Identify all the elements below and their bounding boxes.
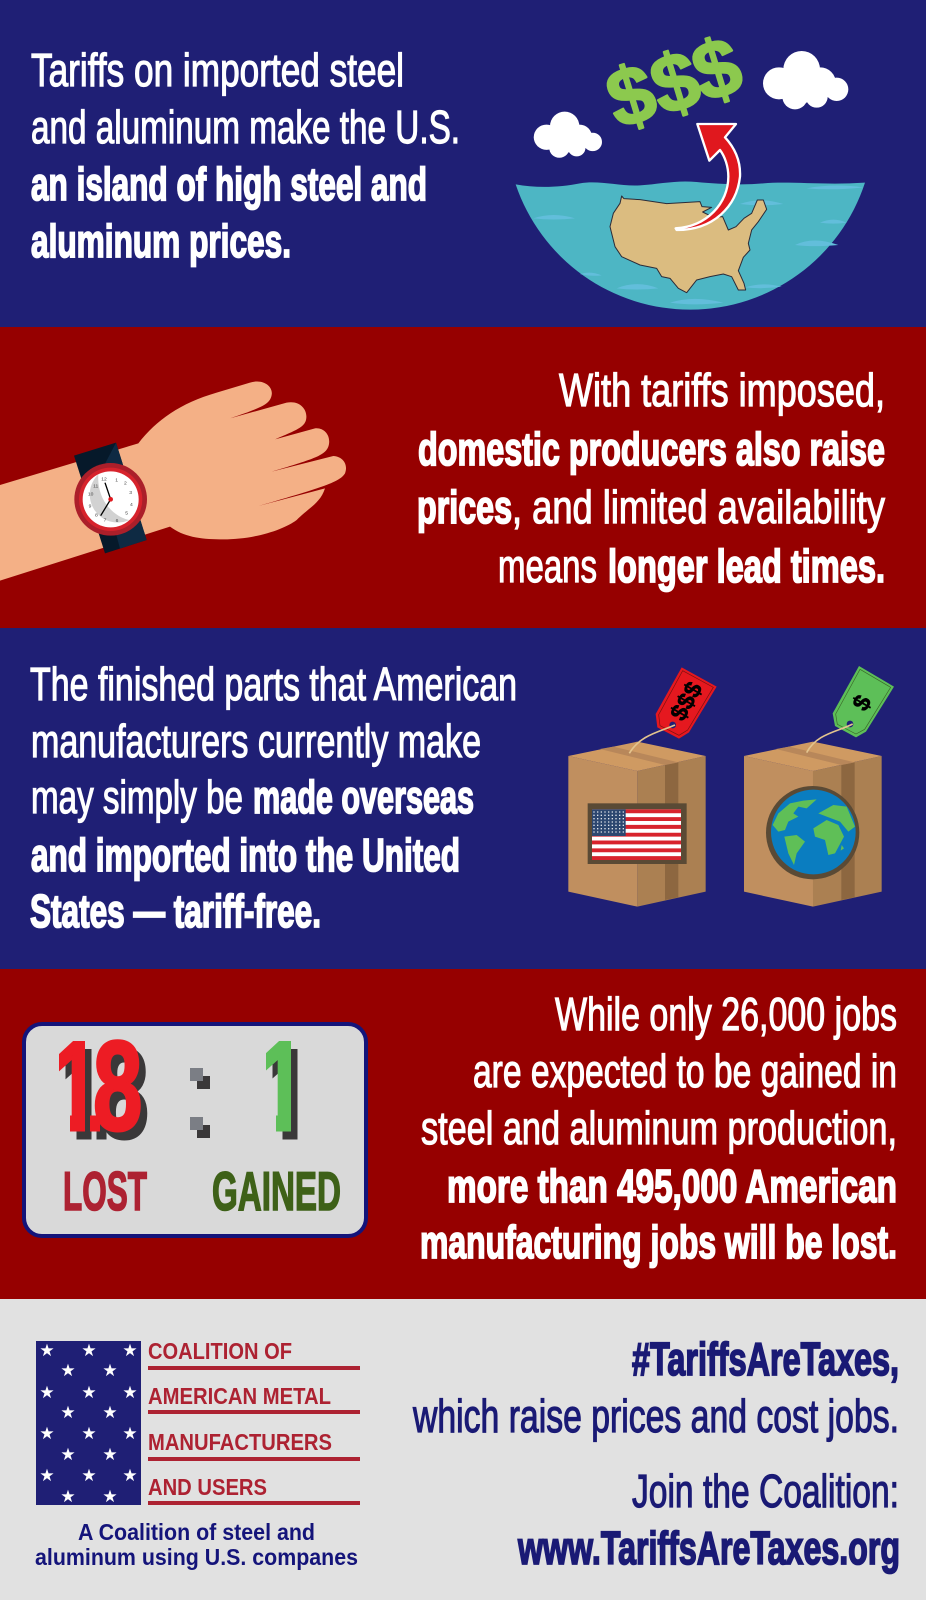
icon: map of the United States [610,196,767,293]
logo: star field [36,1341,141,1506]
logo: star field: ★ [81,1341,97,1360]
logo: star field: ★ [81,1383,97,1402]
logo: star field: ★ [39,1424,55,1443]
icon: red rising arrow [676,124,740,230]
text: overseas statement: The finished parts that American [30,658,517,710]
text: lead times statement [417,364,885,592]
logo: wordmark: AMERICAN METAL [148,1383,331,1409]
icon: watch face: 9 [89,503,92,509]
logo: star field: ★ [122,1466,138,1485]
text: overseas statement: manufacturers currently make [31,715,481,767]
logo: wordmark: COALITION OF [148,1338,292,1364]
logo: star field: ★ [81,1424,97,1443]
icon: right cloud [763,51,848,109]
panel: made overseas [0,628,926,969]
icon: watch face: 11 [93,484,98,490]
icon: U.S. box [568,742,706,907]
panel: island of high prices [0,0,926,327]
label: GAINED: GAINED [212,1160,341,1222]
scoreboard: 18 lost to 1 gained [24,1016,366,1236]
icon: arm and hand [0,381,346,581]
text: lead times statement: means [498,540,597,592]
icon: watch strap [74,443,147,553]
icon: globe label [766,786,859,879]
logo: star field: ★ [60,1403,76,1422]
icon: green dollar signs [596,20,752,147]
icon: watch face [74,463,147,536]
logo: star field: ★ [39,1383,55,1402]
text: call to join [517,1465,900,1574]
logo: wordmark: MANUFACTURERS [148,1429,332,1455]
text: island statement [31,44,460,267]
logo: star field: ★ [102,1361,118,1380]
icon: green dollar signs: $ [682,20,752,120]
text: island statement: Tariffs on imported steel [31,44,404,96]
panel: jobs lost versus gained [0,969,926,1299]
logo: star field: ★ [60,1445,76,1464]
logo: wordmark [148,1338,360,1505]
logo: star field: ★ [39,1341,55,1360]
logo: coalition [35,1338,360,1570]
panel: coalition footer [0,1299,926,1600]
icon: watch face: 12 [101,477,107,483]
icon: watch face: 7 [104,517,107,523]
icon: watch face: 1 [115,477,118,483]
icon: green dollar signs: $ [640,33,710,133]
icon: hand with wristwatch [0,381,346,581]
text: overseas statement: States — tariff-free. [30,885,321,937]
number: 18: 18 [59,1024,149,1166]
icon: left cloud [534,112,602,158]
icon: green price tag: $ [847,691,877,716]
logo: star field: ★ [39,1466,55,1485]
label: LOST: LOST [63,1160,147,1222]
number: 1: 1 [265,1024,314,1166]
colon [190,1068,210,1138]
logo: star field: ★ [60,1487,76,1506]
text: coalition description: aluminum using U.S. companes [35,1544,358,1570]
text: overseas statement: may simply be [31,771,243,823]
icon: watch face: 5 [125,510,128,516]
text: coalition description [35,1519,358,1570]
text: hashtag message [412,1333,899,1442]
text: coalition description: A Coalition of steel and [78,1519,315,1545]
number: 1 [266,1041,298,1140]
icon: American flag label [588,803,687,864]
logo: wordmark: AND USERS [148,1474,267,1500]
icon: U.S. island with rising prices [516,20,865,310]
icon: red price tag [629,667,717,753]
number: 1: 1 [258,1016,307,1158]
logo: star field: ★ [60,1361,76,1380]
icon: watch face: 10 [88,491,94,497]
icon: watch face: 8 [95,513,98,519]
logo: star field: ★ [122,1424,138,1443]
logo: star field: ★ [102,1487,118,1506]
text: lead times statement: prices [417,481,512,533]
text: overseas statement [30,658,517,937]
text: island statement: an island of high steel and [31,158,427,210]
icon: watch face: 6 [116,518,119,524]
icon: green price tag [807,666,894,753]
icon: watch face: 4 [130,502,133,508]
text: island statement: aluminum prices. [31,215,291,267]
logo: star field: ★ [122,1383,138,1402]
logo: star field: ★ [102,1403,118,1422]
text: jobs statement [420,988,897,1268]
icon: watch face: 3 [129,490,132,496]
logo: star field: ★ [81,1466,97,1485]
text: island statement: and aluminum make the U.S. [31,101,460,153]
icon: boxes with price tags [568,666,894,907]
icon: watch face: 2 [124,480,127,486]
text: overseas statement: made overseas [253,771,474,823]
panel: domestic prices and lead times [0,327,926,628]
icon: world box [744,742,882,907]
icon: red price tag: $$$ [665,677,708,726]
logo: star field: ★ [102,1445,118,1464]
icon: green dollar signs: $ [596,46,666,147]
number: 18: 18 [52,1016,142,1158]
text: overseas statement: and imported into the United [31,829,460,881]
logo: star field: ★ [122,1341,138,1360]
icon: water bowl [516,181,865,310]
